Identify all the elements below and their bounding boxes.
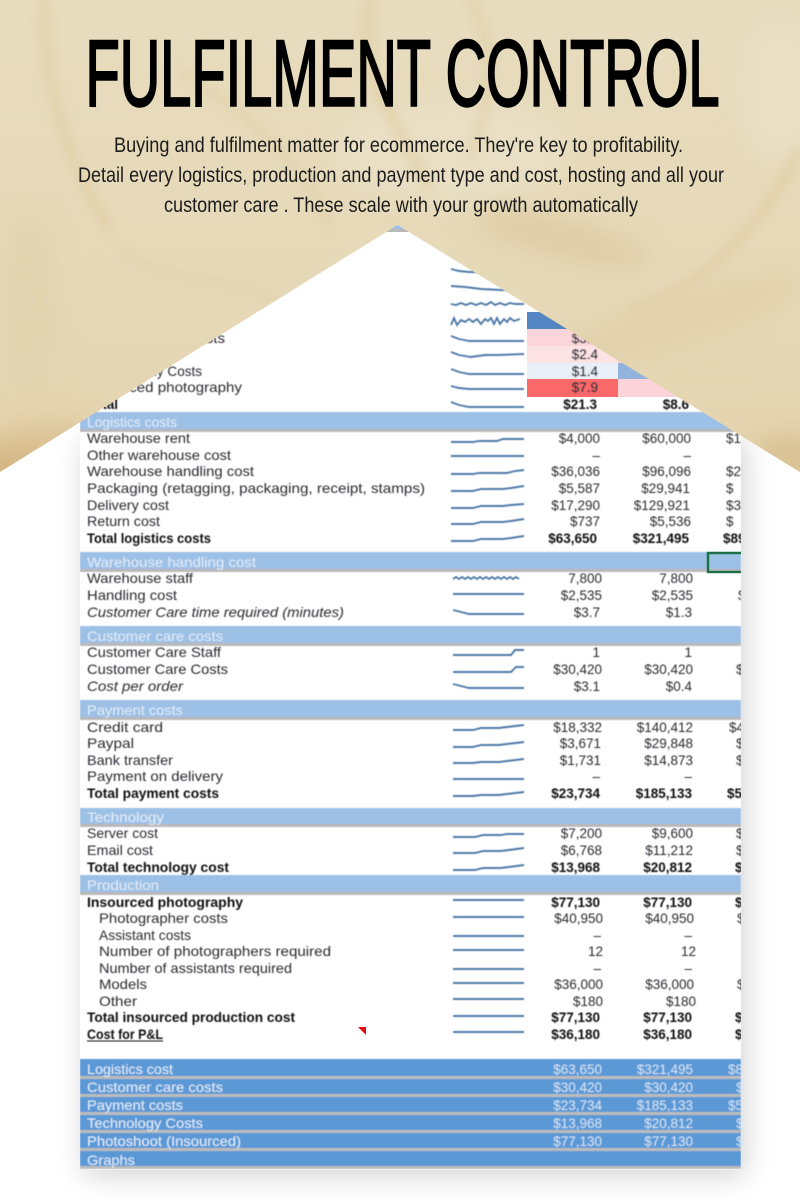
- section: customer care costs: $0.4: [666, 679, 692, 694]
- selected cell outline: [708, 553, 748, 572]
- top partial rows: $21.3: [563, 397, 597, 412]
- section: production: 12: [588, 944, 603, 959]
- section: payment costs: $140,412: [637, 720, 693, 735]
- summary row: payment costs: [80, 1097, 751, 1113]
- section: logistics costs: $4,000: [559, 431, 600, 446]
- comment marker: [358, 1027, 366, 1035]
- header band: production: Production: [87, 877, 159, 893]
- section: logistics costs: $96,096: [642, 464, 691, 479]
- top partial rows: Insourced photography: [87, 379, 242, 395]
- section: production: $4: [737, 911, 753, 926]
- header band: payment costs: Payment costs: [87, 702, 183, 718]
- summary row: customer care costs: $30,420: [644, 1080, 693, 1095]
- section: production: $7: [735, 1010, 750, 1025]
- section: payment costs: $14,873: [644, 753, 693, 768]
- section: technology: $1: [736, 826, 751, 841]
- section: technology: $13,968: [551, 860, 600, 875]
- section: production: $36,180: [643, 1027, 692, 1042]
- section: payment costs: $185,133: [636, 786, 692, 801]
- section: technology: Server cost: [87, 825, 158, 841]
- section: production: $40,950: [554, 911, 603, 926]
- summary row: technology costs: $3: [736, 1116, 751, 1131]
- section: logistics costs: $3: [726, 498, 741, 513]
- section: production: $77,130: [643, 895, 692, 910]
- top partial rows: $7.9: [572, 380, 598, 395]
- section: logistics costs: $737: [570, 514, 600, 529]
- section: logistics costs: $60,000: [642, 431, 691, 446]
- section: warehouse handling cost: $3.7: [574, 605, 600, 620]
- section: production: Assistant costs: [99, 927, 191, 943]
- top partial rows: [87, 269, 689, 412]
- section: logistics costs: Warehouse handling cost: [87, 463, 254, 479]
- section: logistics costs: Packaging (retagging, packaging, receipt, stamps): [87, 480, 425, 496]
- summary row: graphs: [80, 1151, 741, 1168]
- section: technology: $3: [735, 860, 751, 875]
- section: logistics costs: –: [592, 448, 600, 463]
- top partial rows: $2.4: [572, 347, 598, 362]
- section: technology: $6,768: [561, 843, 602, 858]
- section: technology: $1: [736, 843, 751, 858]
- section: customer care costs: $30,420: [644, 662, 693, 677]
- section: logistics costs: $5,536: [650, 514, 691, 529]
- section: logistics costs: $63,650: [548, 531, 597, 546]
- header band: customer care costs: Customer care costs: [87, 628, 223, 644]
- section: logistics costs: $36,036: [551, 464, 600, 479]
- section: warehouse handling cost: $: [738, 588, 746, 603]
- header band: technology: Technology: [87, 809, 164, 825]
- section: technology: $20,812: [643, 860, 692, 875]
- header band: logistics costs: [80, 412, 741, 432]
- section: production: Models: [99, 976, 147, 992]
- summary row: logistics cost: $321,495: [637, 1062, 693, 1077]
- section: production: Number of photographers required: [99, 943, 331, 959]
- section: logistics costs: $: [726, 481, 734, 496]
- header band: warehouse handling cost: Warehouse handling cost: [87, 554, 256, 570]
- header band: payment costs: [80, 700, 741, 720]
- summary row: customer care costs: Customer care costs: [87, 1079, 223, 1095]
- section: customer care costs: $4: [736, 662, 752, 677]
- section: customer care costs: 1: [684, 645, 692, 660]
- section: customer care costs: [80, 626, 752, 694]
- section: production: $77,130: [643, 1010, 692, 1025]
- section: logistics costs: Delivery cost: [87, 497, 169, 513]
- section: logistics costs: Return cost: [87, 513, 160, 529]
- summary row: technology costs: $20,812: [644, 1116, 693, 1131]
- section: production: $36,000: [554, 977, 603, 992]
- section: payment costs: $44: [729, 720, 752, 735]
- section: production: $36,000: [645, 977, 694, 992]
- section: payment costs: $23,734: [551, 786, 600, 801]
- section: technology: [80, 808, 751, 875]
- summary row: logistics cost: [80, 1059, 751, 1077]
- summary row: customer care costs: [80, 1079, 752, 1095]
- section: technology: Total technology cost: [87, 859, 229, 875]
- section: payment costs: [80, 700, 752, 801]
- intro text: customer care . These scale with your growth automatically: [164, 194, 638, 217]
- summary row: payment costs: $185,133: [637, 1098, 693, 1113]
- section: production: $36,180: [551, 1027, 600, 1042]
- beige roof background: [0, 0, 800, 486]
- summary row: payment costs: Payment costs: [87, 1097, 183, 1113]
- top partial rows: $8.6: [663, 397, 689, 412]
- top partial rows: $3.3: [572, 331, 598, 346]
- section: logistics costs: $2: [726, 464, 741, 479]
- section: payment costs: $9: [736, 736, 751, 751]
- section: technology: $7,200: [561, 826, 602, 841]
- section: logistics costs: $1: [726, 431, 741, 446]
- section: payment costs: $58: [727, 786, 750, 801]
- section: customer care costs: Customer Care Staff: [87, 644, 221, 660]
- section: warehouse handling cost: 7,800: [568, 571, 602, 586]
- heatmap cells: [527, 312, 678, 397]
- summary row: payment costs: $23,734: [553, 1098, 602, 1113]
- section: production: $180: [573, 994, 603, 1009]
- section: production: 12: [681, 944, 696, 959]
- section: production: –: [684, 928, 692, 943]
- summary row: photoshoot: $7: [736, 1134, 751, 1149]
- section: production: Insourced photography: [87, 894, 243, 910]
- section: warehouse handling cost: $2,535: [652, 588, 693, 603]
- section: logistics costs: $5,587: [559, 481, 600, 496]
- summary row: photoshoot: Photoshoot (Insourced): [87, 1133, 241, 1149]
- section: logistics costs: $89: [723, 531, 746, 546]
- section: technology: $9,600: [652, 826, 693, 841]
- section: payment costs: $29,848: [644, 736, 693, 751]
- section: payment costs: $4: [736, 753, 752, 768]
- summary row: photoshoot: $77,130: [644, 1134, 693, 1149]
- section: logistics costs: Warehouse rent: [87, 430, 190, 446]
- section: payment costs: –: [592, 769, 600, 784]
- spreadsheet table panel: [80, 225, 753, 1170]
- header band: technology: [80, 808, 741, 827]
- section: production: Cost for P&L: [87, 1026, 163, 1042]
- section: payment costs: $1,731: [560, 753, 601, 768]
- section: payment costs: $18,332: [553, 720, 602, 735]
- section: production: Other: [99, 993, 137, 1009]
- summary row: payment costs: $58: [728, 1098, 751, 1113]
- section: warehouse handling cost: Handling cost: [87, 587, 177, 603]
- top partial rows: Total: [87, 396, 118, 412]
- summary row: customer care costs: $30,420: [553, 1080, 602, 1095]
- section: logistics costs: $321,495: [633, 531, 689, 546]
- section: production: $7: [735, 895, 750, 910]
- section: production: $3: [735, 1027, 751, 1042]
- section: production: $3: [737, 977, 752, 992]
- section: payment costs: –: [684, 769, 692, 784]
- section: customer care costs: 1: [592, 645, 600, 660]
- header band: customer care costs: [80, 626, 741, 646]
- intro text: Buying and fulfilment matter for ecommerce. They're key to profitability.: [114, 134, 683, 157]
- section: production: $77,130: [551, 895, 600, 910]
- section: customer care costs: $3.1: [574, 679, 600, 694]
- section: production: Photographer costs: [99, 910, 228, 926]
- section: payment costs: Total payment costs: [87, 785, 219, 801]
- section: payment costs: Bank transfer: [87, 752, 173, 768]
- header band: production: [80, 875, 741, 895]
- section: production: Total insourced production cost: [87, 1009, 295, 1025]
- section: production: Number of assistants required: [99, 960, 292, 976]
- section: warehouse handling cost: [80, 552, 746, 620]
- summary row: photoshoot: $77,130: [553, 1134, 602, 1149]
- section: payment costs: Paypal: [87, 735, 134, 751]
- section: production: $77,130: [551, 1010, 600, 1025]
- section: logistics costs: $29,941: [641, 481, 690, 496]
- section: production: –: [593, 928, 601, 943]
- top partial rows: Customer care costs: [87, 330, 225, 346]
- section: logistics costs: Other warehouse cost: [87, 447, 231, 463]
- table shadow: [84, 440, 746, 1176]
- section: logistics costs: Total logistics costs: [87, 530, 211, 546]
- section: production: $180: [666, 994, 696, 1009]
- summary row: technology costs: $13,968: [553, 1116, 602, 1131]
- summary row: technology costs: [80, 1115, 751, 1131]
- summary row: graphs: Graphs: [87, 1152, 135, 1168]
- section: logistics costs: –: [683, 448, 691, 463]
- section: logistics costs: [80, 412, 746, 546]
- summary row: photoshoot: [80, 1133, 751, 1149]
- section: warehouse handling cost: $2,535: [561, 588, 602, 603]
- section: payment costs: Payment on delivery: [87, 768, 223, 784]
- summary row: logistics cost: $89: [728, 1062, 751, 1077]
- header band: warehouse handling cost: [80, 552, 741, 572]
- section: production: –: [684, 961, 692, 976]
- section: production: [80, 875, 753, 1042]
- header band: logistics costs: Logistics costs: [87, 414, 177, 430]
- summary row: logistics cost: Logistics cost: [87, 1061, 173, 1077]
- summary row: logistics cost: $63,650: [553, 1062, 602, 1077]
- section: warehouse handling cost: Warehouse staff: [87, 570, 193, 586]
- section: logistics costs: $: [726, 514, 734, 529]
- section: warehouse handling cost: Customer Care time required (minutes): [87, 604, 344, 620]
- top header tip: [386, 225, 409, 232]
- section: production: $40,950: [645, 911, 694, 926]
- section: technology: $11,212: [645, 843, 693, 858]
- section: customer care costs: Customer Care Costs: [87, 661, 228, 677]
- section: warehouse handling cost: 7,800: [659, 571, 693, 586]
- summary row: customer care costs: $4: [736, 1080, 752, 1095]
- section: payment costs: $3,671: [560, 736, 601, 751]
- section: customer care costs: Cost per order: [87, 678, 184, 694]
- section: logistics costs: $17,290: [551, 498, 600, 513]
- top partial rows: $1.4: [572, 364, 598, 379]
- summary row: technology costs: Technology Costs: [87, 1115, 203, 1131]
- section: summary rows: [80, 1059, 752, 1169]
- section: logistics costs: $129,921: [634, 498, 690, 513]
- section: production: –: [593, 961, 601, 976]
- section: warehouse handling cost: $1.3: [666, 605, 692, 620]
- section: technology: Email cost: [87, 842, 153, 858]
- section: customer care costs: $30,420: [553, 662, 602, 677]
- top partial rows: Photography Costs: [87, 363, 202, 379]
- intro text: [78, 134, 724, 217]
- section: payment costs: Credit card: [87, 719, 163, 735]
